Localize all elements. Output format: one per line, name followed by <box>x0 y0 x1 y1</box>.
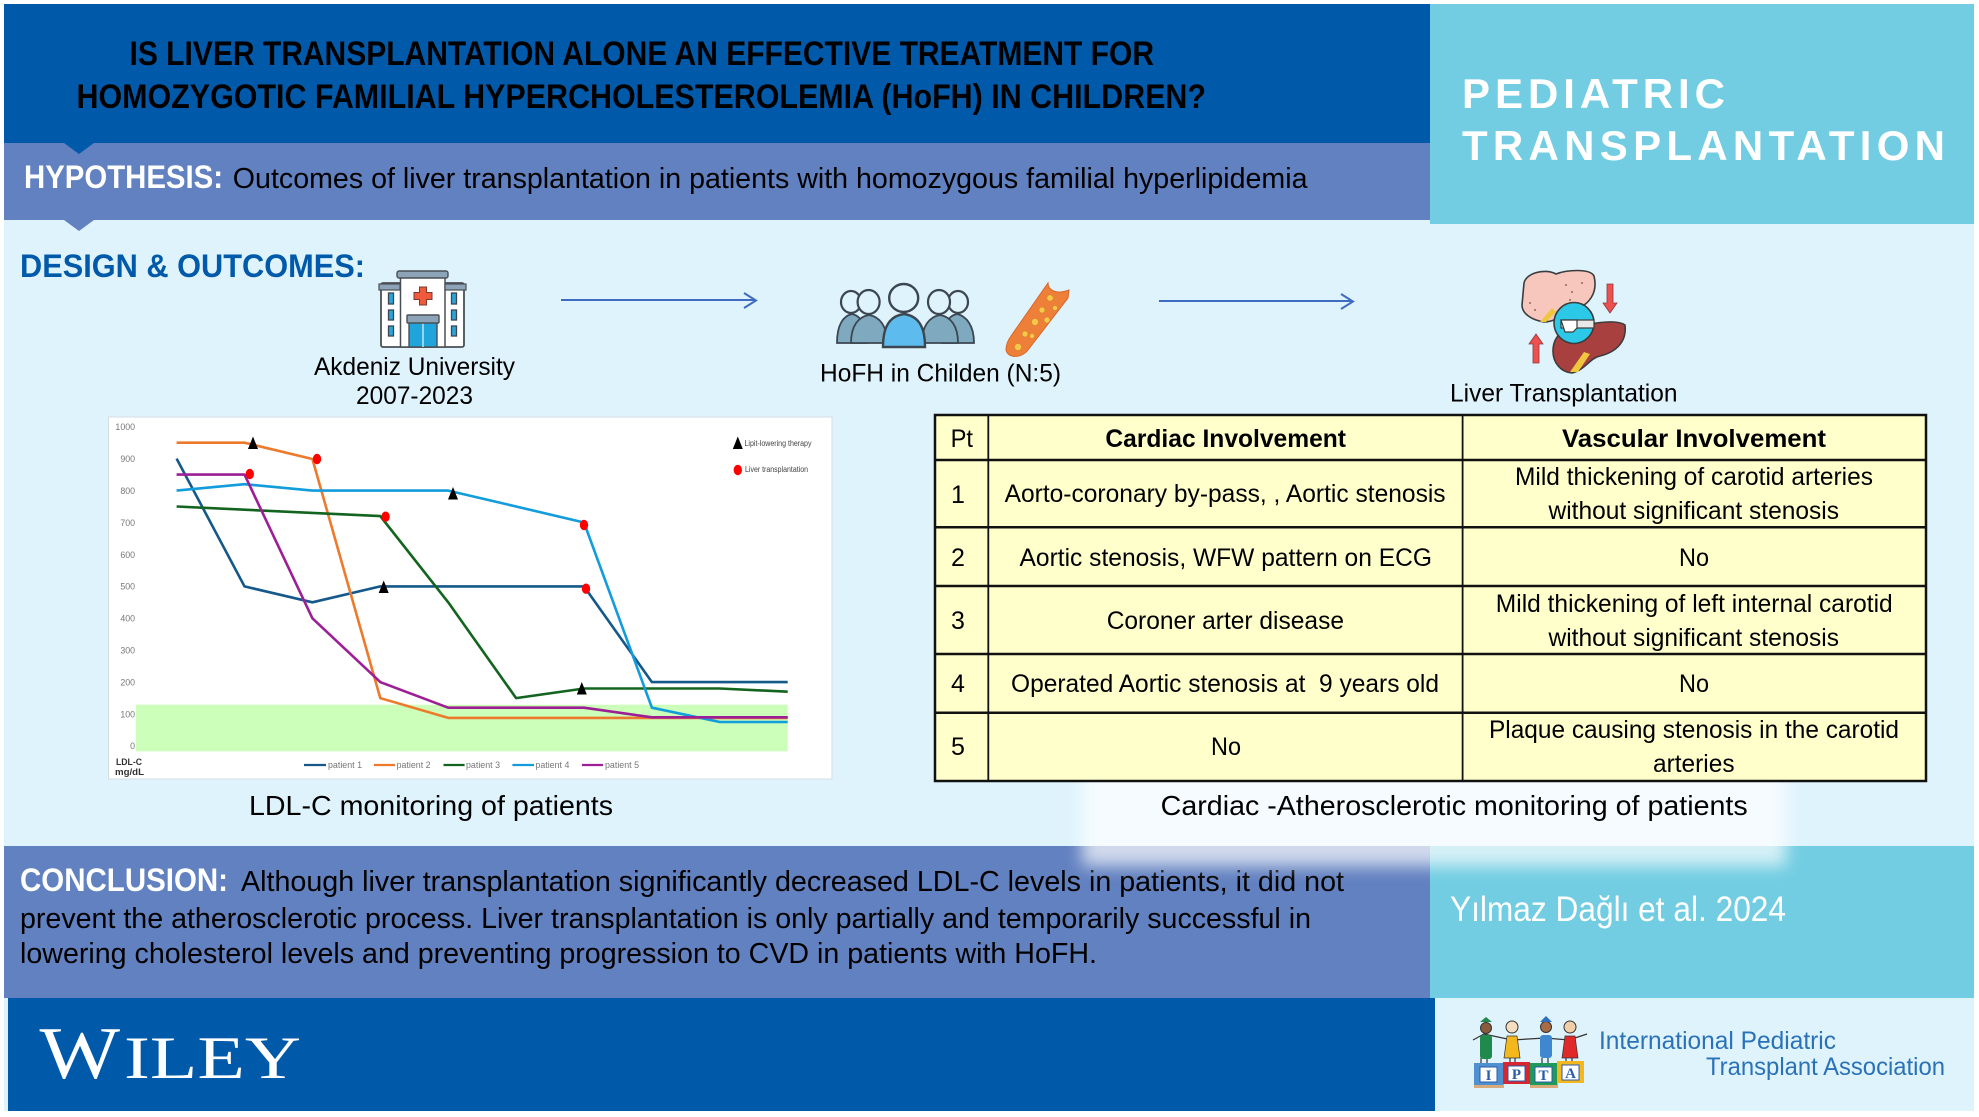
citation panel <box>1430 846 1974 998</box>
y axis ticks: 100 <box>120 710 135 720</box>
association name: Transplant Association <box>1706 1053 1945 1081</box>
patient lines <box>177 443 788 722</box>
table header: Vascular Involvement <box>1562 425 1827 453</box>
table row 4: Operated Aortic stenosis at 9 years old <box>1011 670 1439 698</box>
label: HoFH in children: HoFH in Childen (N:5) <box>820 360 1061 388</box>
table row 1: Mild thickening of carotid arteries <box>1515 463 1873 491</box>
table row 3: 3 <box>951 607 965 635</box>
series legend: patient 3 <box>466 760 500 771</box>
conclusion text: Although liver transplantation significantly decreased LDL-C levels in patients, it did not <box>241 866 1344 898</box>
table row 4: No <box>1679 670 1709 698</box>
conclusion band <box>4 846 1430 998</box>
marker legend: Liver transplantation <box>745 465 808 474</box>
label: liver transplantation: Liver Transplantation <box>1450 380 1678 408</box>
table grid <box>935 415 1926 781</box>
y axis ticks: 500 <box>120 582 135 592</box>
glow overlay behind table caption <box>1082 760 1786 866</box>
table row 3: without significant stenosis <box>1548 624 1839 652</box>
y axis ticks: 1000 <box>115 422 135 432</box>
target range band <box>136 705 788 751</box>
series legend: patient 4 <box>535 760 569 771</box>
table header: Pt <box>951 425 973 453</box>
table header <box>951 425 1827 453</box>
icon: IPTA letter blocks: I <box>1486 1068 1492 1084</box>
markers: lipid-lowering therapy <box>248 436 587 694</box>
axis title: LDL-C <box>116 757 142 768</box>
table row 2: 2 <box>951 544 965 572</box>
series legend <box>304 760 639 771</box>
table row 3: Coroner arter disease <box>1107 607 1344 635</box>
hypothesis band <box>4 143 1430 231</box>
arrow: patients to liver transplantation <box>1159 294 1353 309</box>
icon: IPTA letter blocks: A <box>1565 1066 1576 1082</box>
y axis ticks: 300 <box>120 646 135 656</box>
table header: Cardiac Involvement <box>1105 425 1347 453</box>
table row 5: arteries <box>1653 750 1735 778</box>
icon: children on blocks <box>1473 1016 1587 1064</box>
table row 3 <box>951 590 1893 652</box>
IPTA logo <box>1473 1016 1945 1088</box>
association name <box>1599 1027 1945 1081</box>
title heading <box>76 35 1206 116</box>
publisher logo: Wiley: ILEY <box>124 1025 301 1091</box>
marker legend: Lipit-lowering therapy <box>744 439 812 448</box>
conclusion label: CONCLUSION: <box>20 862 228 898</box>
table row 1: Aorto-coronary by-pass, , Aortic stenosis <box>1005 480 1446 508</box>
journal name <box>1462 70 1945 169</box>
table caption: Cardiac -Atherosclerotic monitoring of patients <box>1161 790 1748 821</box>
chart caption: LDL-C monitoring of patients <box>249 790 613 821</box>
icon: artery with plaque <box>1006 283 1069 356</box>
label: Akdeniz University <box>314 353 515 410</box>
table row 2: No <box>1679 544 1709 572</box>
label: Akdeniz University: 2007-2023 <box>356 382 473 410</box>
section heading: design and outcomes: DESIGN & OUTCOMES: <box>20 248 365 284</box>
arrow: hospital to patients <box>561 293 756 308</box>
series legend: patient 5 <box>605 760 639 771</box>
y axis ticks <box>115 422 135 751</box>
icon: IPTA letter blocks <box>1474 1061 1584 1088</box>
conclusion text: lowering cholesterol levels and preventing progression to CVD in patients with HoFH. <box>20 938 1097 970</box>
icon: hospital <box>379 271 466 347</box>
title heading: HOMOZYGOTIC FAMILIAL HYPERCHOLESTEROLEMIA (HoFH) IN CHILDREN? <box>76 78 1206 116</box>
y axis ticks: 200 <box>120 678 135 688</box>
publisher logo: Wiley: W <box>40 1013 120 1095</box>
table: cardiac and vascular involvement <box>935 415 1926 781</box>
association name: International Pediatric <box>1599 1027 1836 1055</box>
publisher band <box>8 998 1435 1111</box>
markers: liver transplantation <box>246 454 590 594</box>
marker legend <box>733 436 812 475</box>
table row 5: Plaque causing stenosis in the carotid <box>1489 716 1899 744</box>
table row 4 <box>951 670 1709 698</box>
icon: IPTA letter blocks: T <box>1538 1068 1549 1084</box>
table row 1: without significant stenosis <box>1548 497 1839 525</box>
hypothesis label: HYPOTHESIS: <box>24 159 223 195</box>
journal panel <box>1430 4 1974 224</box>
y axis ticks: 600 <box>120 550 135 560</box>
title heading: IS LIVER TRANSPLANTATION ALONE AN EFFECTIVE TREATMENT FOR <box>130 35 1154 73</box>
chart: LDL-C monitoring <box>108 417 832 779</box>
y axis ticks: 900 <box>120 454 135 464</box>
table row 5: 5 <box>951 733 965 761</box>
table row 5 <box>951 716 1899 778</box>
series legend: patient 1 <box>328 760 362 771</box>
y axis ticks: 700 <box>120 518 135 528</box>
table row 3: Mild thickening of left internal carotid <box>1496 590 1893 618</box>
series legend: patient 2 <box>397 760 431 771</box>
journal name: PEDIATRIC <box>1462 70 1725 117</box>
icon: group of patients <box>837 284 974 347</box>
axis title <box>115 757 144 778</box>
table row 5: No <box>1211 733 1241 761</box>
title banner <box>4 4 1430 143</box>
table row 2: Aortic stenosis, WFW pattern on ECG <box>1020 544 1432 572</box>
table row 4: 4 <box>951 670 965 698</box>
citation text: Yılmaz Dağlı et al. 2024 <box>1450 890 1786 929</box>
table row 1 <box>951 463 1873 525</box>
table row 2 <box>951 544 1709 572</box>
conclusion text: prevent the atherosclerotic process. Liver transplantation is only partially and temporarily successful in <box>20 903 1311 935</box>
icon: liver transplant <box>1522 270 1625 373</box>
y axis ticks: 0 <box>130 741 135 751</box>
hypothesis text: Outcomes of liver transplantation in patients with homozygous familial hyperlipidemia <box>233 163 1308 195</box>
axis title: mg/dL <box>115 767 144 778</box>
publisher logo: Wiley <box>40 1013 301 1095</box>
label: Akdeniz University: Akdeniz University <box>314 353 515 381</box>
y axis ticks: 400 <box>120 614 135 624</box>
y axis ticks: 800 <box>120 486 135 496</box>
table row 1: 1 <box>951 481 965 509</box>
conclusion text <box>20 866 1344 970</box>
journal name: TRANSPLANTATION <box>1462 122 1945 169</box>
icon: IPTA letter blocks: P <box>1512 1067 1521 1083</box>
